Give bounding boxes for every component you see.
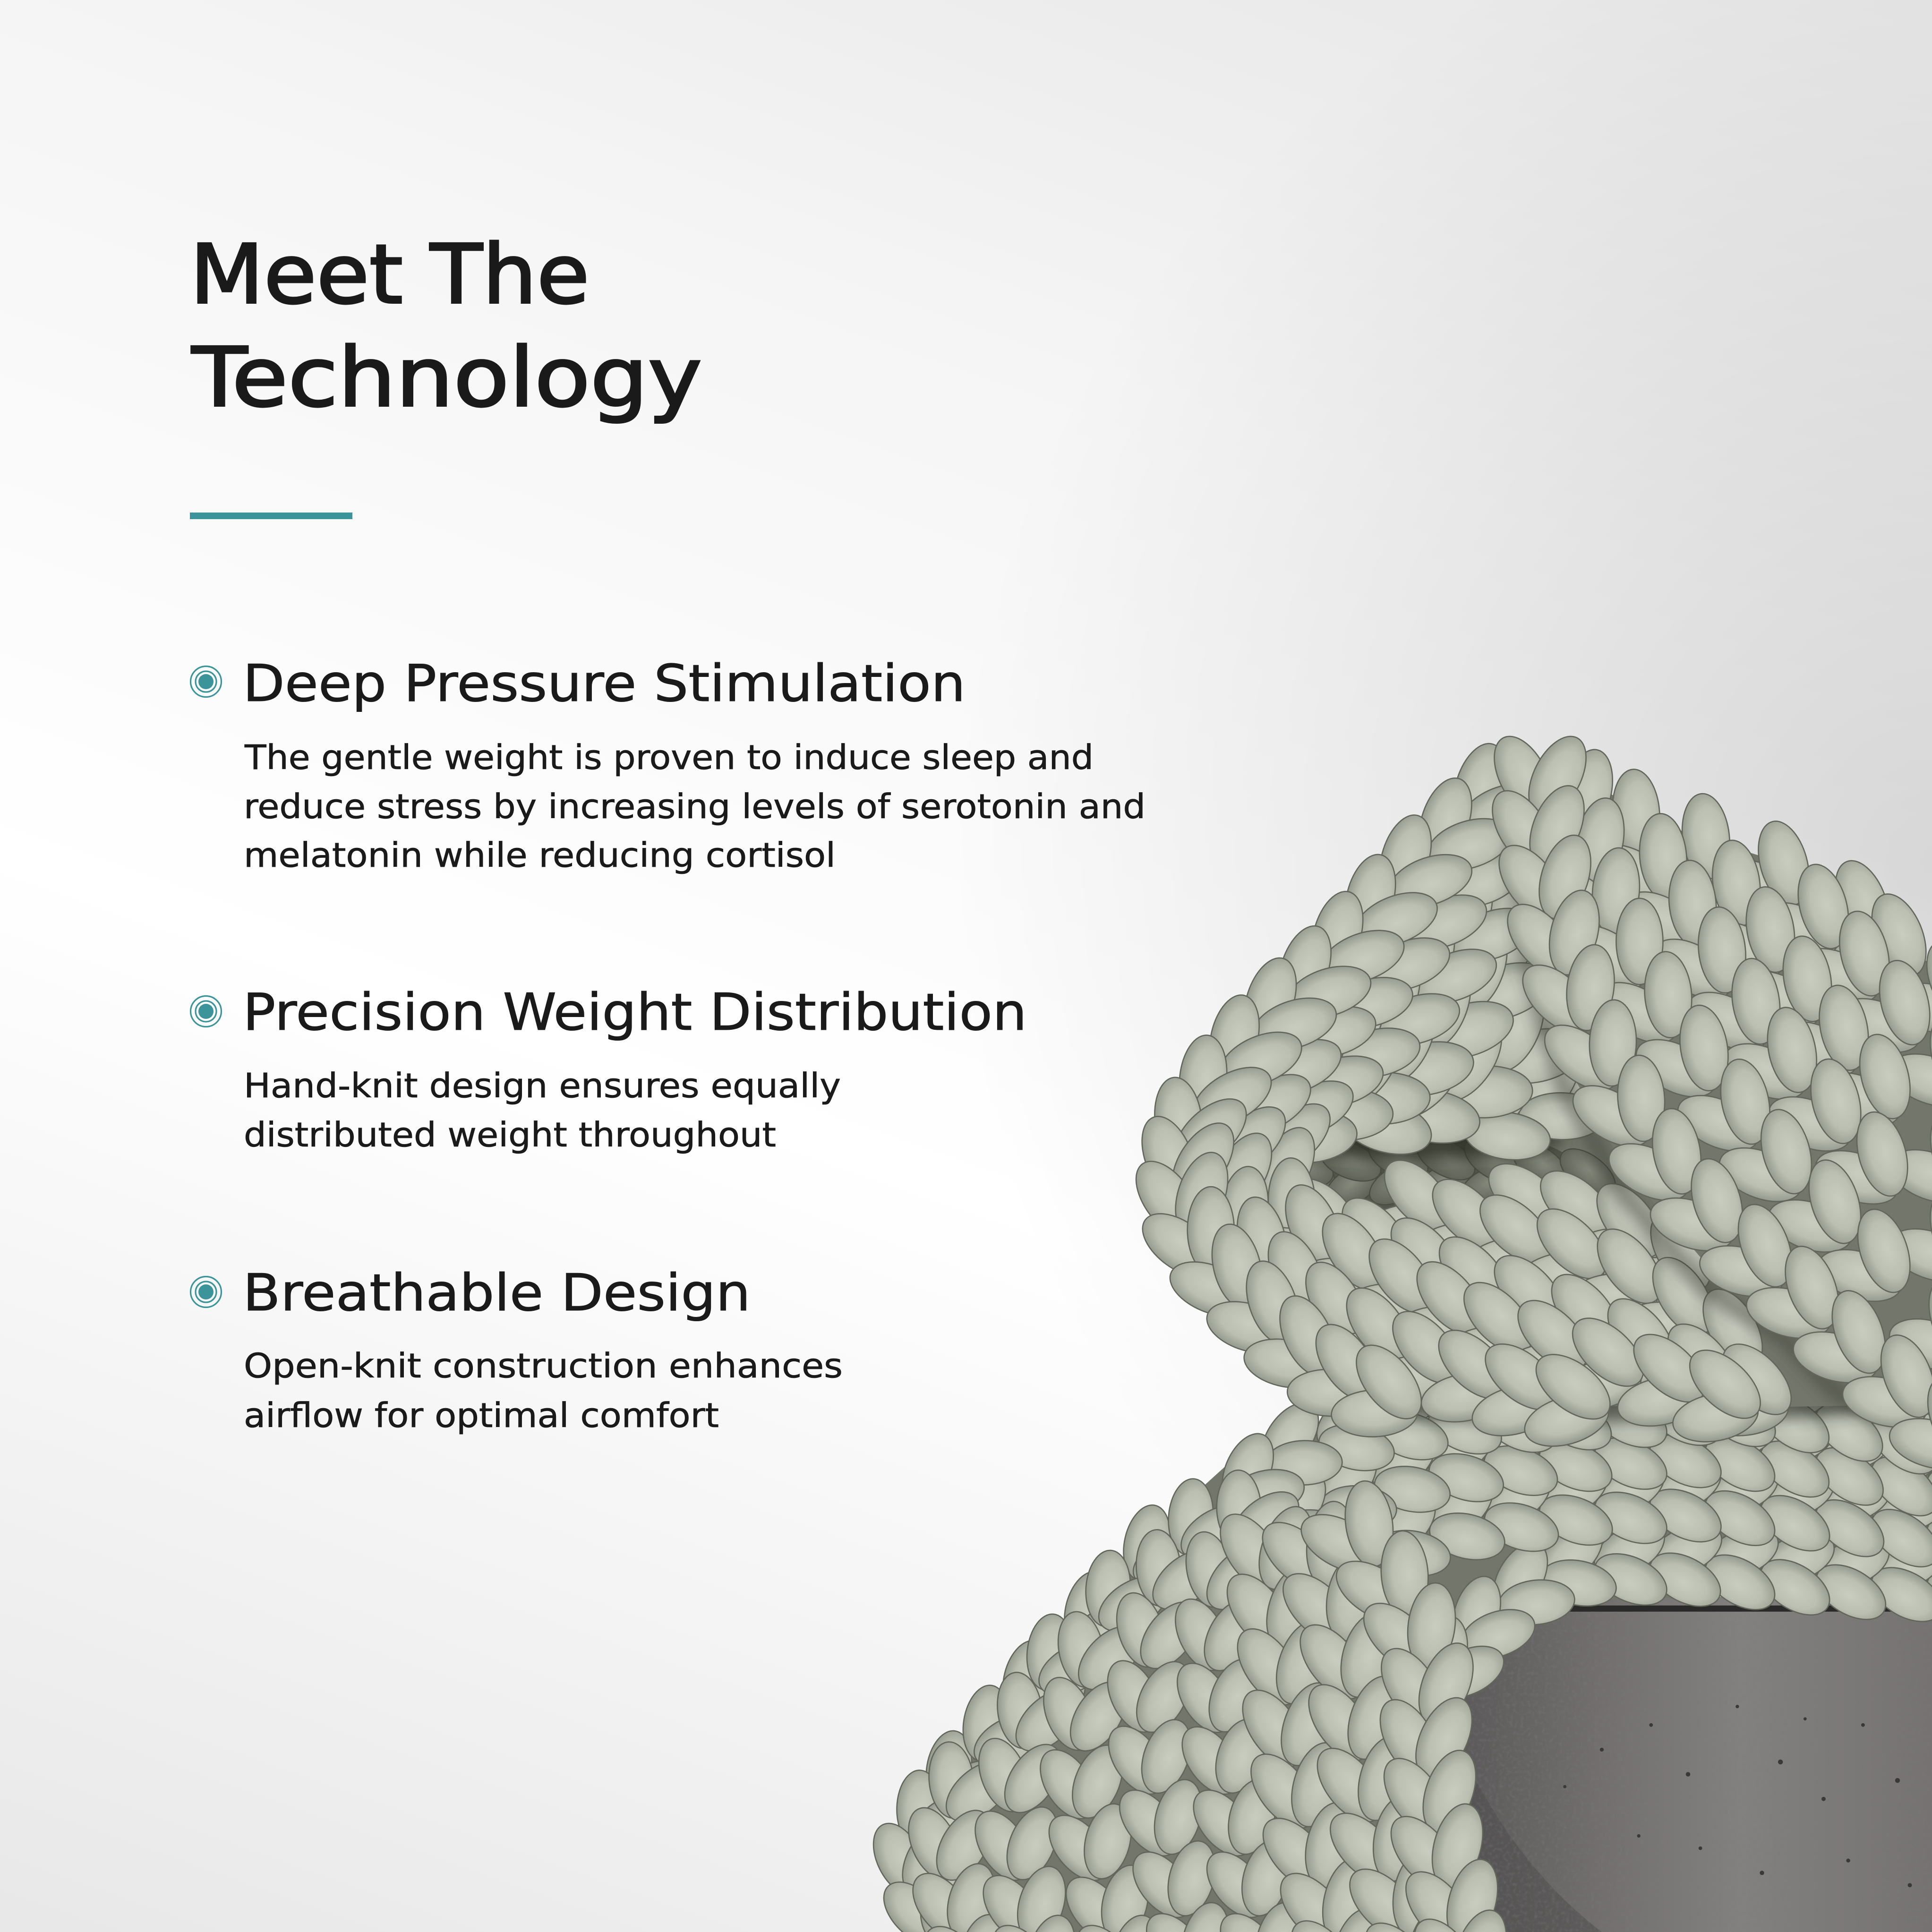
- description: [244, 1346, 843, 1435]
- feature: breathable design: [191, 1264, 843, 1435]
- feature: precision weight distribution: [191, 983, 1027, 1154]
- product image: knitted blanket on concrete stone: [914, 764, 1932, 1932]
- description: [244, 738, 1146, 875]
- icon: target bullet: [191, 666, 221, 697]
- hole shadow: [1269, 1120, 1565, 1160]
- description: melatonin while reducing cortisol: [244, 836, 836, 875]
- icon: target bullet: [191, 1276, 221, 1308]
- horizontal braids: [1254, 1405, 1932, 1666]
- icon: target bullet: [191, 996, 221, 1027]
- rolled upper blanket: [1158, 764, 1932, 1407]
- title: [190, 227, 702, 425]
- description: Hand-knit design ensures equally: [244, 1066, 841, 1105]
- feature: deep pressure stimulation: [191, 654, 1146, 875]
- concrete stone: [1454, 1597, 1932, 1932]
- heading: Deep Pressure Stimulation: [243, 654, 966, 713]
- description: distributed weight throughout: [244, 1115, 776, 1154]
- folded-over blanket flap: [1524, 764, 1932, 1434]
- lower blanket hanging over the stone: [914, 1405, 1932, 1932]
- accent rule: [190, 513, 352, 519]
- description: Open-knit construction enhances: [244, 1346, 843, 1385]
- shadow under the roll: [1318, 1387, 1885, 1422]
- heading: Breathable Design: [243, 1264, 751, 1323]
- roll braids wrapping around the hole: [1185, 801, 1756, 1405]
- title: Technology: [191, 330, 702, 425]
- title: Meet The: [190, 227, 590, 322]
- shadow along the flap fold: [1515, 788, 1932, 1436]
- flap braids: [1540, 781, 1932, 1434]
- description: [244, 1066, 841, 1154]
- description: The gentle weight is proven to induce sleep and: [244, 738, 1094, 777]
- heading: Precision Weight Distribution: [243, 983, 1027, 1042]
- description: reduce stress by increasing levels of serotonin and: [244, 787, 1146, 826]
- hanging braids: [914, 1518, 1464, 1932]
- hole interior: [1245, 1126, 1590, 1215]
- description: airflow for optimal comfort: [244, 1396, 719, 1435]
